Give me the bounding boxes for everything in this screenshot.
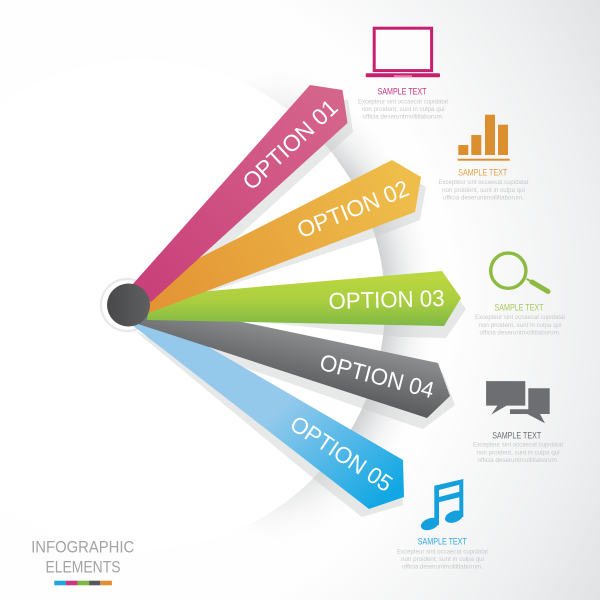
icon: laptop <box>366 28 440 77</box>
heading: SAMPLE TEXT <box>418 537 467 547</box>
hub <box>107 284 150 326</box>
arrow: option 05: OPTION 05 <box>286 410 397 497</box>
text block: Excepteur sint occaecat cupidatat <box>358 98 448 105</box>
panel: option 01 info <box>358 28 448 121</box>
heading: SAMPLE TEXT <box>494 303 544 313</box>
text block <box>475 314 565 337</box>
panel: option 02 info <box>438 115 529 202</box>
heading: SAMPLE TEXT <box>378 87 427 97</box>
heading: SAMPLE TEXT <box>492 430 542 440</box>
panel: option 04 info <box>473 381 563 464</box>
text block <box>397 548 488 571</box>
panel: option 05 info <box>397 479 488 571</box>
text block: Excepteur sint occaecat cupidatat <box>475 314 565 321</box>
text block <box>358 98 448 121</box>
text block <box>473 442 563 464</box>
icon: music note <box>419 479 465 533</box>
icon: bar chart <box>458 115 510 161</box>
heading: SAMPLE TEXT <box>458 167 508 177</box>
big white circle with edge shadow <box>267 94 416 516</box>
text block: Excepteur sint occaecat cupidatat <box>397 548 488 555</box>
title: infographic elements: ELEMENTS <box>46 558 120 577</box>
text block: officia deseruntmollitlaborum. <box>480 330 561 337</box>
arrow: option 05 <box>132 307 404 509</box>
text block: non proident, sunt in culpa qui <box>362 106 444 113</box>
text block: officia deseruntmollitlaborum. <box>478 457 559 464</box>
arrow: option 02: OPTION 02 <box>293 175 413 243</box>
icon: magnifier <box>491 253 548 292</box>
arrow: option 01: OPTION 01 <box>237 94 343 195</box>
text block: non proident, sunt in culpa qui <box>401 556 484 563</box>
text block: Excepteur sint occaecat cupidatat <box>473 442 563 449</box>
arrow shadows <box>134 95 466 517</box>
text block: non proident, sunt in culpa qui <box>478 322 562 329</box>
text block: Excepteur sint occaecat cupidatat <box>438 179 529 186</box>
arrow: option 04 <box>138 302 450 418</box>
text block: non proident, sunt in culpa qui <box>476 450 560 456</box>
arrow: option 01 <box>132 85 348 302</box>
hub ring <box>101 279 153 331</box>
text block: officia deseruntmollitlaborum. <box>362 114 444 121</box>
icon: speech bubbles <box>486 381 550 423</box>
text block: officia deseruntmollitlaborum. <box>402 564 483 571</box>
arrow: option 03 <box>147 271 461 326</box>
text block: non proident, sunt in culpa qui <box>442 187 525 194</box>
text block <box>438 179 529 202</box>
title: infographic elements <box>31 538 134 585</box>
title: infographic elements: INFOGRAPHIC <box>31 538 134 557</box>
fan of option arrows <box>107 85 466 517</box>
arrow: option 03: OPTION 03 <box>328 285 445 314</box>
colour legend bar <box>54 581 112 585</box>
arrow: option 04: OPTION 04 <box>317 349 437 403</box>
text block: officia deseruntmollitlaborum. <box>443 195 524 202</box>
arrow: option 02 <box>149 160 421 313</box>
panel: option 03 info <box>475 253 565 337</box>
